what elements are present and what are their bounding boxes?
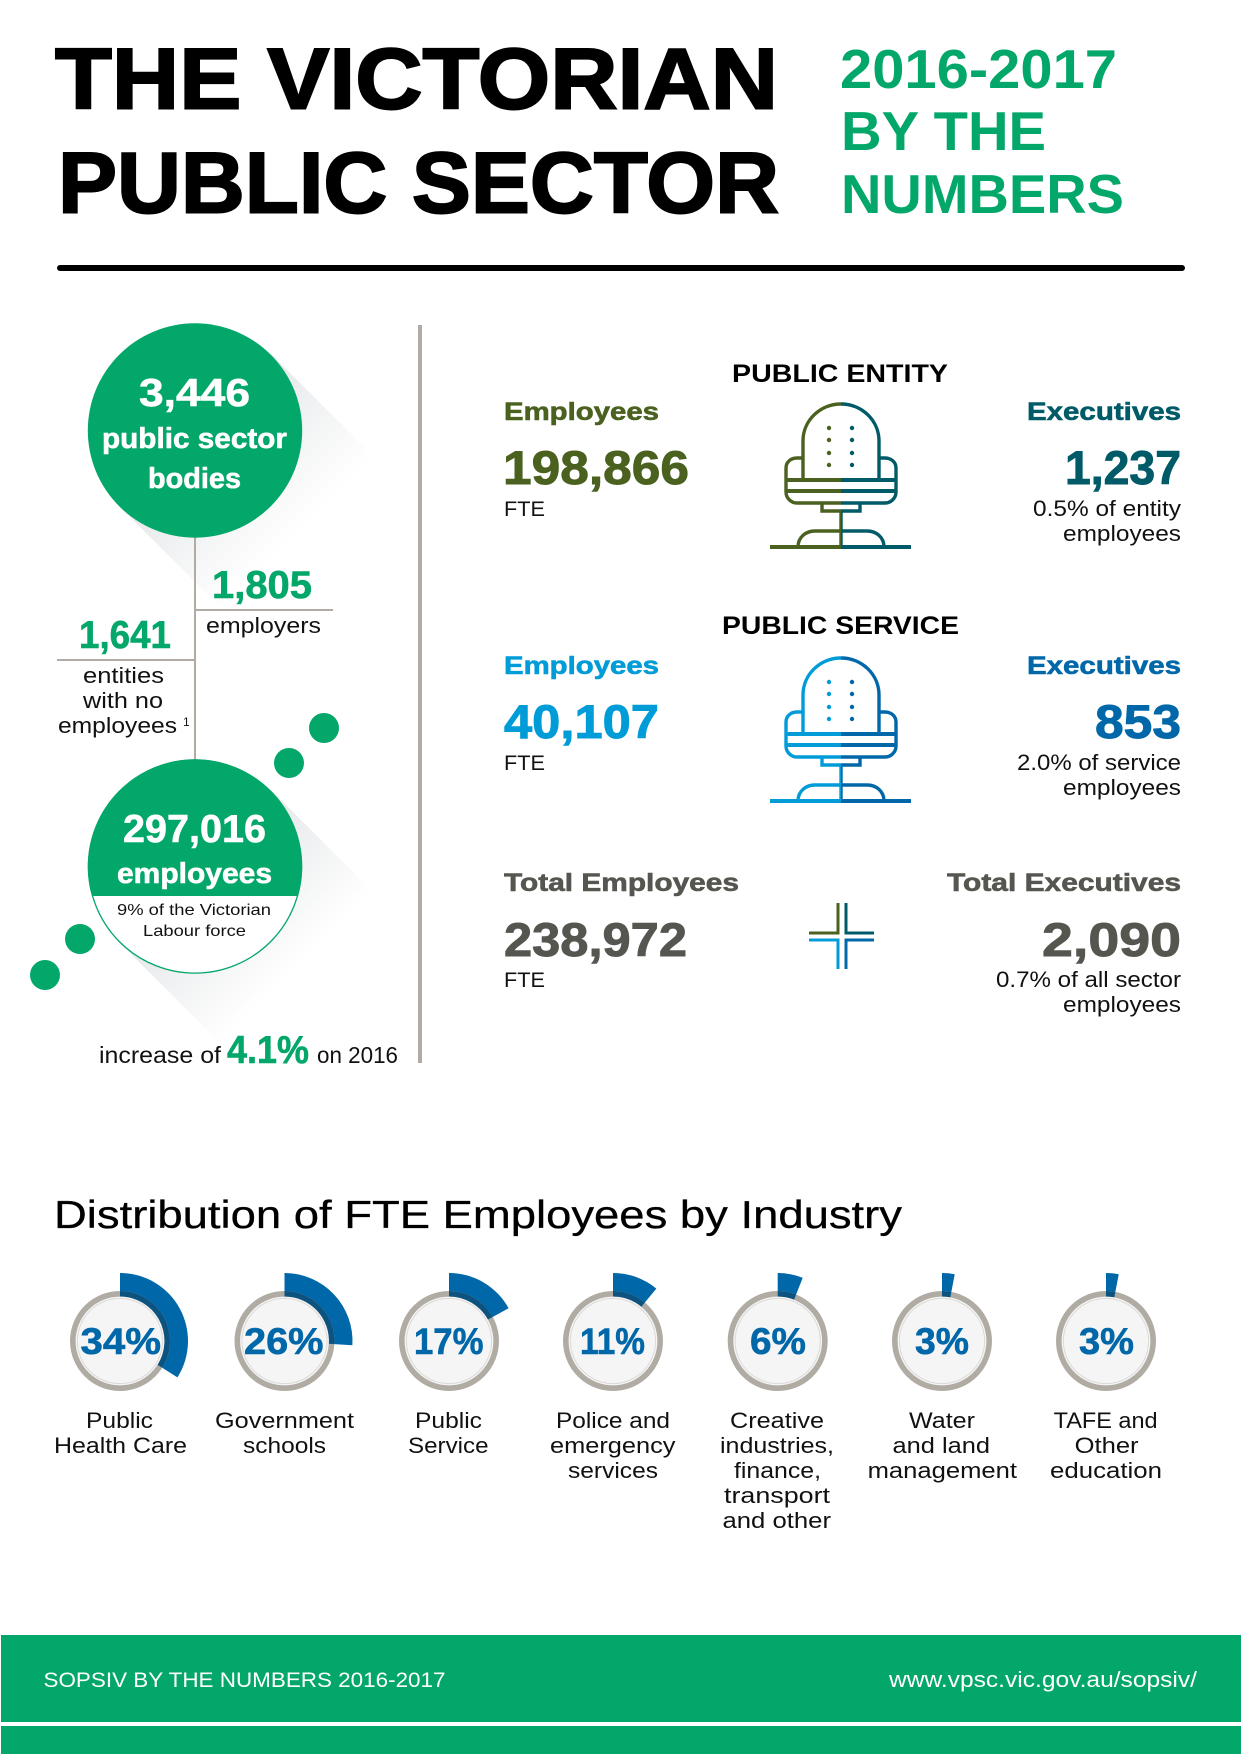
executives: 1,237: employees bbox=[1063, 521, 1181, 546]
subtitle: 2016-2017 by the numbers: NUMBERS bbox=[841, 163, 1124, 225]
decorative dots: lower left bbox=[30, 924, 95, 990]
circle: 3,446 public sector bodies: 3,446 bbox=[139, 372, 250, 415]
panel: public sector hierarchy bbox=[30, 323, 397, 1064]
circle: 3,446 public sector bodies: public sector bbox=[102, 423, 287, 455]
total employees: 238,972 FTE: 238,972 bbox=[504, 913, 687, 966]
circle: 297,016 employees bbox=[88, 759, 302, 974]
gauge: 3% TAFE and other education: TAFE and bbox=[1054, 1408, 1158, 1433]
total executives: 2,090: employees bbox=[1063, 992, 1181, 1017]
employees: 40,107 FTE: FTE bbox=[504, 752, 545, 775]
title: THE VICTORIAN bbox=[55, 32, 778, 128]
gauge: 26% government schools: schools bbox=[243, 1433, 326, 1458]
heading: public entity: PUBLIC ENTITY bbox=[732, 360, 948, 388]
executives: 1,237 bbox=[1027, 398, 1181, 546]
stat: increase of 4.1% on 2016: increase of bbox=[99, 1042, 222, 1068]
circle: 3,446 public sector bodies bbox=[88, 323, 302, 538]
icon: office chair, light and dark blue bbox=[770, 658, 911, 801]
gauge: 17% public service: 17% bbox=[414, 1321, 484, 1362]
stat: 1,641 entities with no employees: employees bbox=[58, 713, 177, 738]
stat: 1,641 entities with no employees: entities bbox=[83, 663, 164, 688]
gauge: 6% creative industries, finance, transport and other: industries, bbox=[720, 1433, 834, 1458]
gauge: 34% public health care: Health Care bbox=[54, 1433, 187, 1458]
gauge: 11% police and emergency services: Police and bbox=[556, 1408, 670, 1433]
gauge: 26% government schools: Government bbox=[215, 1408, 355, 1433]
gauge: 34% public health care: Public bbox=[86, 1408, 153, 1433]
executives: 1,237: 0.5% of entity bbox=[1033, 496, 1181, 521]
total executives: 2,090 bbox=[947, 869, 1181, 1017]
gauge: 17% public service bbox=[402, 1273, 509, 1458]
gauge: 11% police and emergency services bbox=[550, 1273, 676, 1483]
executives: 853: 853 bbox=[1095, 695, 1181, 748]
connector lines bbox=[57, 536, 333, 760]
subtitle: 2016-2017 by the numbers: 2016-2017 bbox=[840, 38, 1117, 100]
gauge: 17% public service: Service bbox=[408, 1433, 488, 1458]
header rule bbox=[57, 265, 1185, 271]
gauge: 6% creative industries, finance, transport and other: finance, bbox=[734, 1458, 821, 1483]
panel: public service bbox=[504, 612, 1181, 801]
total employees: 238,972 FTE bbox=[504, 869, 739, 992]
footer band bbox=[1, 1635, 1241, 1754]
gauge: 3% water and land management: management bbox=[868, 1458, 1018, 1483]
executives: 853: 2.0% of service bbox=[1017, 750, 1181, 775]
stat: 1,641 entities with no employees: 1,641 bbox=[79, 614, 171, 657]
icon: plus in four colours bbox=[809, 903, 874, 969]
decorative dots: upper right bbox=[274, 713, 339, 778]
employees: 198,866 FTE bbox=[503, 398, 689, 521]
gauge: 6% creative industries, finance, transport and other: 6% bbox=[750, 1321, 806, 1362]
gauge: 3% water and land management: and land bbox=[892, 1433, 990, 1458]
subtitle: 2016-2017 by the numbers bbox=[840, 38, 1124, 225]
executives: 1,237: Executives bbox=[1027, 398, 1181, 426]
stat: increase of 4.1% on 2016: on 2016 bbox=[317, 1042, 398, 1068]
panel: totals bbox=[504, 869, 1181, 1017]
footer text: website: www.vpsc.vic.gov.au/sopsiv/ bbox=[888, 1667, 1198, 1692]
stat: 1,805 employers: employers bbox=[206, 613, 321, 638]
employees: 40,107 FTE: Employees bbox=[504, 652, 659, 680]
title: PUBLIC SECTOR bbox=[58, 136, 779, 232]
total employees: 238,972 FTE: Total Employees bbox=[504, 869, 739, 897]
stat: 1,641 entities with no employees bbox=[58, 614, 190, 738]
circle shadow: employees bbox=[119, 790, 431, 1102]
gauge: 26% government schools: 26% bbox=[244, 1321, 324, 1362]
circle: 3,446 public sector bodies: bodies bbox=[148, 463, 241, 495]
gauge: 34% public health care bbox=[54, 1273, 188, 1458]
subtitle: 2016-2017 by the numbers: BY THE bbox=[841, 100, 1046, 162]
employees: 40,107 FTE: 40,107 bbox=[504, 695, 659, 748]
stat: 1,805 employers bbox=[206, 564, 321, 638]
gauge: 3% TAFE and other education: 3% bbox=[1079, 1321, 1134, 1362]
icon: office chair, olive and teal bbox=[770, 404, 911, 547]
employees: 40,107 FTE bbox=[504, 652, 659, 775]
gauge: 11% police and emergency services: 11% bbox=[580, 1321, 645, 1362]
gauge: 26% government schools bbox=[215, 1273, 355, 1458]
gauge: 11% police and emergency services: emergency bbox=[550, 1433, 676, 1458]
executives: 853: employees bbox=[1063, 775, 1181, 800]
stat: 1,641 entities with no employees: with no bbox=[82, 688, 163, 713]
heading: distribution of FTE employees by industry: Distribution of FTE Employees by Industry bbox=[54, 1194, 903, 1237]
employees: 198,866 FTE: Employees bbox=[504, 398, 659, 426]
total executives: 2,090: 2,090 bbox=[1042, 913, 1181, 966]
circle: 297,016 employees: employees bbox=[117, 858, 272, 890]
panel: public entity bbox=[503, 360, 1181, 547]
gauge: 3% water and land management: 3% bbox=[915, 1321, 969, 1362]
footer text: report name: SOPSIV BY THE NUMBERS 2016-2017 bbox=[44, 1669, 446, 1692]
stat: increase of 4.1% on 2016: 4.1% bbox=[227, 1029, 309, 1072]
employees: 198,866 FTE: 198,866 bbox=[503, 441, 689, 494]
panel: industry distribution bbox=[54, 1273, 1162, 1533]
circle: 297,016 employees: Labour force bbox=[143, 923, 246, 940]
gauge: 6% creative industries, finance, transport and other: Creative bbox=[730, 1408, 824, 1433]
stat: increase of 4.1% on 2016 bbox=[99, 1029, 398, 1072]
title bbox=[55, 32, 779, 232]
executives: 853 bbox=[1017, 652, 1181, 800]
executives: 853: Executives bbox=[1027, 652, 1181, 680]
vertical divider bbox=[418, 325, 422, 1063]
heading: public service: PUBLIC SERVICE bbox=[722, 612, 959, 640]
employees: 198,866 FTE: FTE bbox=[504, 498, 545, 521]
total executives: 2,090: 0.7% of all sector bbox=[996, 967, 1181, 992]
gauge: 6% creative industries, finance, transport and other bbox=[720, 1273, 834, 1533]
circle shadow: public sector bodies bbox=[119, 354, 431, 666]
gauge: 6% creative industries, finance, transport and other: transport bbox=[724, 1483, 831, 1508]
stat: 1,805 employers: 1,805 bbox=[212, 564, 312, 607]
gauge: 3% TAFE and other education bbox=[1050, 1273, 1162, 1483]
total employees: 238,972 FTE: FTE bbox=[504, 969, 545, 992]
gauge: 6% creative industries, finance, transport and other: and other bbox=[722, 1508, 832, 1533]
gauge: 34% public health care: 34% bbox=[80, 1321, 161, 1362]
gauge: 11% police and emergency services: services bbox=[568, 1458, 658, 1483]
total executives: 2,090: Total Executives bbox=[947, 869, 1181, 897]
stat: 1,641 entities with no employees: 1 bbox=[183, 715, 190, 729]
gauge: 3% water and land management: Water bbox=[909, 1408, 976, 1433]
gauge: 17% public service: Public bbox=[415, 1408, 482, 1433]
gauge: 3% water and land management bbox=[868, 1273, 1018, 1483]
executives: 1,237: 1,237 bbox=[1065, 441, 1181, 494]
gauge: 3% TAFE and other education: education bbox=[1050, 1458, 1162, 1483]
gauge: 3% TAFE and other education: Other bbox=[1075, 1433, 1139, 1458]
circle: 297,016 employees: 297,016 bbox=[123, 808, 266, 851]
circle: 297,016 employees: 9% of the Victorian bbox=[117, 902, 271, 919]
